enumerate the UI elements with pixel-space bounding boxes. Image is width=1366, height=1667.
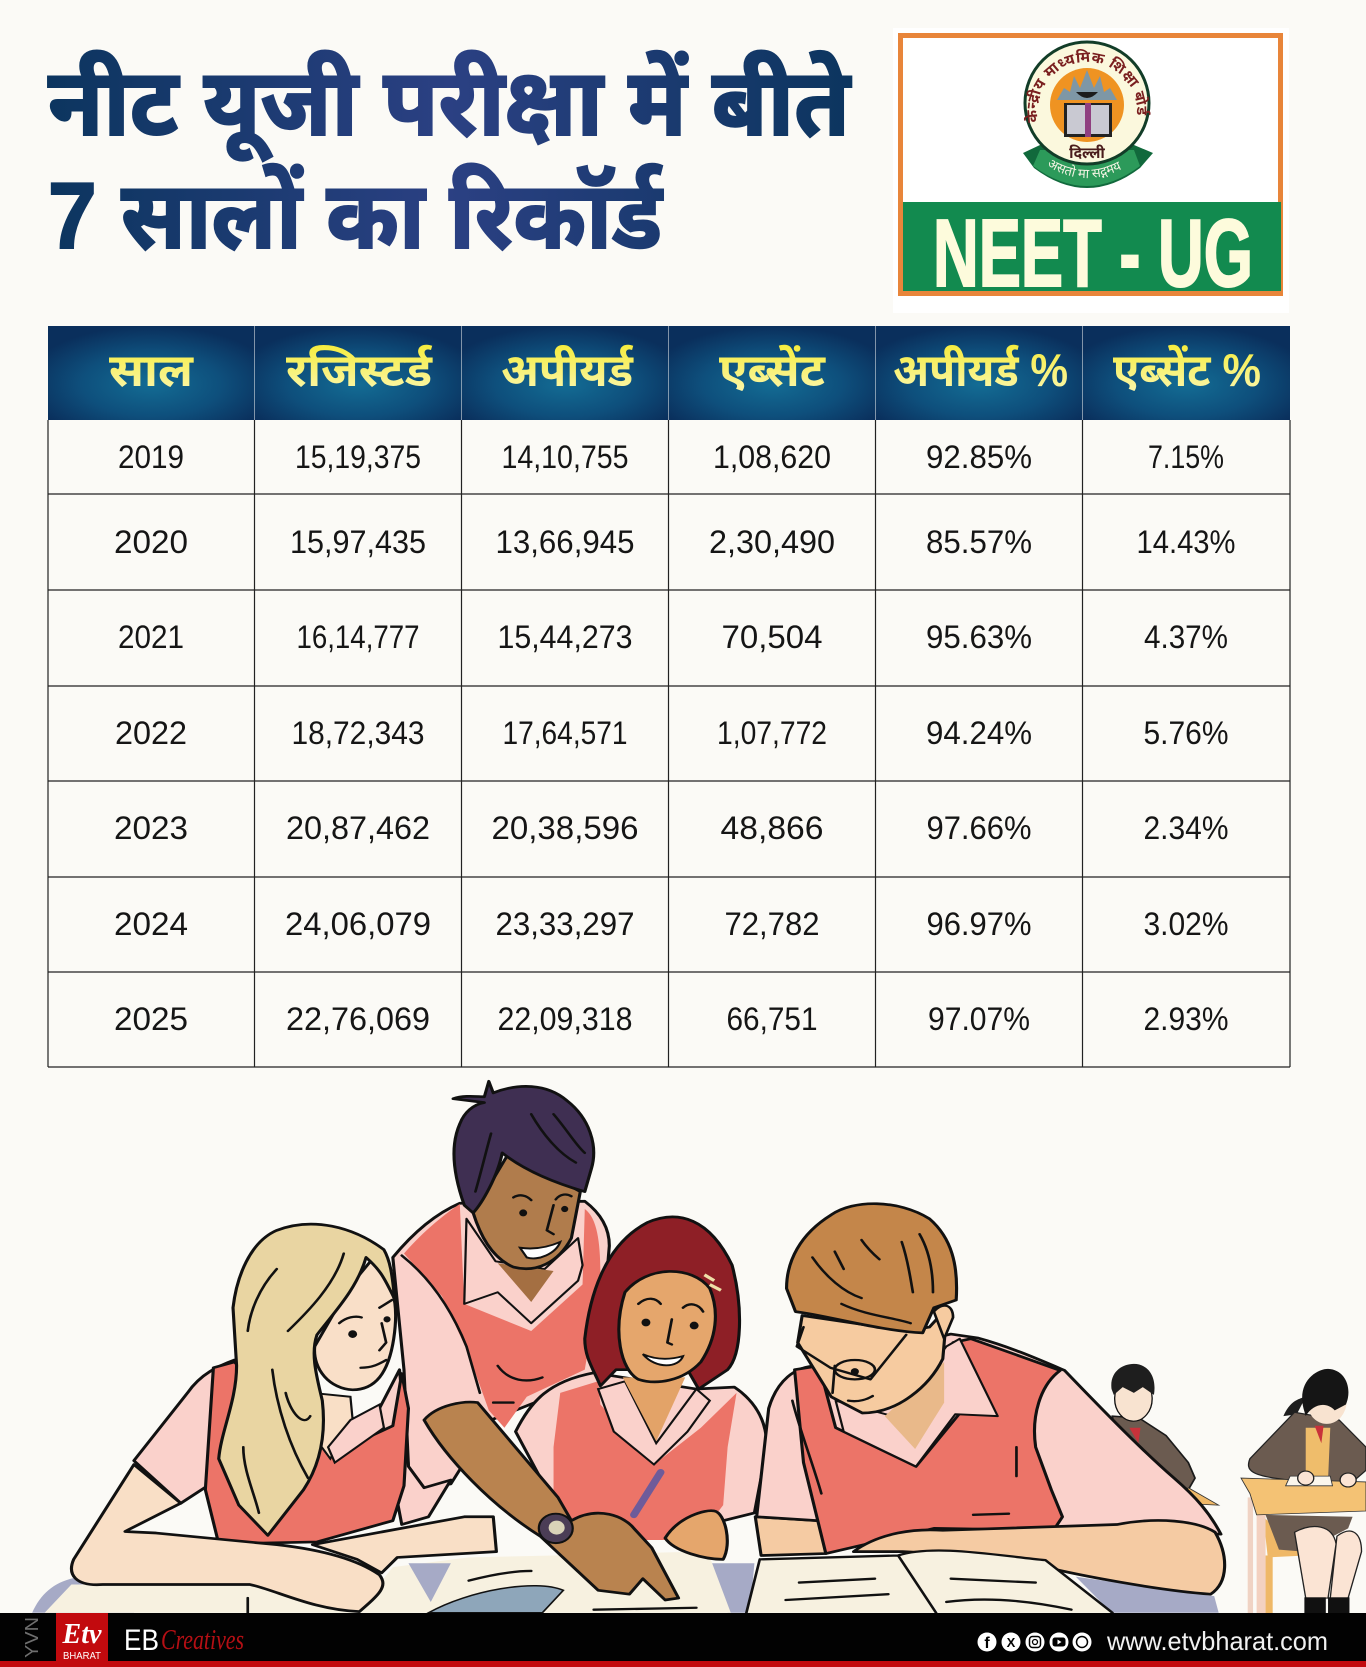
EB Creatives: EB [124, 1624, 159, 1657]
row 2024: 3.02% [1144, 906, 1228, 942]
row 2022 [115, 715, 1228, 751]
illustration: students studying [32, 1081, 1366, 1614]
girl with red hair [516, 1217, 767, 1559]
row 2022: 1,07,772 [717, 715, 827, 751]
open book right [746, 1550, 1112, 1613]
row 2024: 24,06,079 [285, 906, 431, 942]
table header row: अपीयर्ड % [893, 344, 1068, 396]
title [48, 50, 852, 268]
emblem: CBSE seal: असतो मा सद्गमय [1049, 160, 1121, 178]
row 2020: 2,30,490 [709, 524, 835, 560]
girl hair [219, 1224, 395, 1535]
row 2020: 85.57% [926, 524, 1032, 560]
row 2025 [114, 1001, 1228, 1037]
row 2020: 2020 [114, 524, 188, 560]
row 2024: 96.97% [926, 906, 1032, 942]
row 2020 [114, 524, 1236, 560]
row 2023: 2.34% [1144, 810, 1228, 846]
red hair girl face [619, 1271, 715, 1382]
emblem: CBSE seal [1023, 40, 1153, 188]
row 2021: 4.37% [1144, 619, 1228, 655]
row 2019: 2019 [118, 439, 184, 475]
EB Creatives [124, 1624, 244, 1657]
row 2022: 2022 [115, 715, 187, 751]
glasses boy arm [854, 1520, 1225, 1594]
blonde girl [72, 1224, 496, 1612]
pointing arm with watch [424, 1402, 679, 1600]
row 2021 [118, 619, 1228, 655]
boy vest [404, 1204, 600, 1428]
row 2022: 5.76% [1144, 715, 1228, 751]
logo: NEET-UG [893, 28, 1289, 313]
girl face [315, 1261, 396, 1390]
table header row: एब्सेंट [719, 344, 826, 396]
row 2019: 1,08,620 [713, 439, 831, 475]
row 2021: 15,44,273 [498, 619, 632, 655]
ETV Bharat logo: BHARAT [63, 1651, 101, 1662]
table header row: अपीयर्ड [501, 344, 634, 396]
row 2022: 18,72,343 [292, 715, 424, 751]
row 2023: 2023 [114, 810, 188, 846]
boy shirt [393, 1201, 609, 1488]
title: 7 सालों का रिकॉर्ड [48, 163, 663, 268]
row 2019: 7.15% [1148, 439, 1224, 475]
glasses boy hair [787, 1204, 957, 1333]
row 2023: 20,87,462 [286, 810, 430, 846]
row 2022: 94.24% [926, 715, 1032, 751]
row 2024 [114, 906, 1228, 942]
girl neck [310, 1393, 353, 1459]
emblem: CBSE seal: केन्द्रीय माध्यमिक शिक्षा बोर्ड [1024, 49, 1150, 123]
red hair girl collar [598, 1381, 710, 1465]
row 2025: 2025 [114, 1001, 188, 1037]
row 2019: 92.85% [926, 439, 1032, 475]
glasses boy face [798, 1308, 947, 1413]
glasses boy vest [795, 1339, 1062, 1554]
glasses [797, 1327, 906, 1393]
title: नीट यूजी परीक्षा में बीते [48, 50, 852, 162]
small student one [1062, 1364, 1219, 1532]
boy with dark hair [393, 1081, 609, 1488]
red hair girl hand [665, 1511, 727, 1559]
boy with glasses [755, 1204, 1225, 1594]
row 2024: 72,782 [724, 906, 820, 942]
row 2025: 66,751 [726, 1001, 818, 1037]
social icons [978, 1632, 1092, 1652]
pen [634, 1472, 661, 1515]
boy neck and collar [464, 1219, 583, 1323]
table header row: साल [109, 344, 194, 396]
footer bar [0, 1613, 1366, 1667]
girl sleeve right [379, 1370, 451, 1525]
row 2025: 2.93% [1144, 1001, 1228, 1037]
row 2020: 15,97,435 [290, 524, 426, 560]
row 2022: 17,64,571 [502, 715, 628, 751]
row 2024: 23,33,297 [496, 906, 634, 942]
YVN tag: YVN [22, 1617, 42, 1658]
row 2025: 22,76,069 [286, 1001, 430, 1037]
table header row: रजिस्टर्ड [286, 344, 433, 396]
center open book [45, 1552, 731, 1613]
girl left sleeve [134, 1360, 237, 1503]
row 2020: 14.43% [1136, 524, 1236, 560]
red hair girl shirt [516, 1373, 767, 1521]
table header row: एब्सेंट % [1113, 344, 1261, 396]
boy face [473, 1153, 580, 1269]
row 2021: 2021 [118, 619, 184, 655]
emblem: CBSE seal: दिल्ली [1069, 145, 1105, 162]
girl arm [72, 1465, 383, 1612]
row 2019 [118, 439, 1224, 475]
social icons: X [1007, 1635, 1016, 1650]
row 2023: 20,38,596 [492, 810, 638, 846]
row 2023: 97.66% [926, 810, 1032, 846]
EB Creatives: Creatives [161, 1625, 244, 1656]
row 2021: 70,504 [722, 619, 822, 655]
row 2023: 48,866 [720, 810, 824, 846]
row 2024: 2024 [114, 906, 188, 942]
row 2019: 14,10,755 [502, 439, 628, 475]
social icons: f [984, 1635, 990, 1652]
row 2020: 13,66,945 [496, 524, 634, 560]
table header row [48, 326, 1290, 420]
glasses boy shirt [757, 1334, 1221, 1534]
glasses boy collar [836, 1339, 998, 1466]
red hair girl vest [554, 1381, 737, 1540]
small student two [1241, 1369, 1366, 1614]
row 2025: 97.07% [928, 1001, 1030, 1037]
red hair [585, 1217, 740, 1389]
data table [48, 326, 1290, 1067]
girl vest [205, 1362, 408, 1544]
ETV Bharat logo: Etv [62, 1619, 102, 1650]
row 2021: 95.63% [926, 619, 1032, 655]
glasses boy forearm [755, 1517, 826, 1555]
website: www.etvbharat.com [1106, 1626, 1328, 1656]
boy hair [453, 1081, 594, 1213]
row 2021: 16,14,777 [296, 619, 420, 655]
row 2025: 22,09,318 [498, 1001, 632, 1037]
table surface [32, 1575, 134, 1613]
ETV Bharat logo [56, 1613, 108, 1662]
row 2019: 15,19,375 [295, 439, 421, 475]
row 2023 [114, 810, 1228, 846]
